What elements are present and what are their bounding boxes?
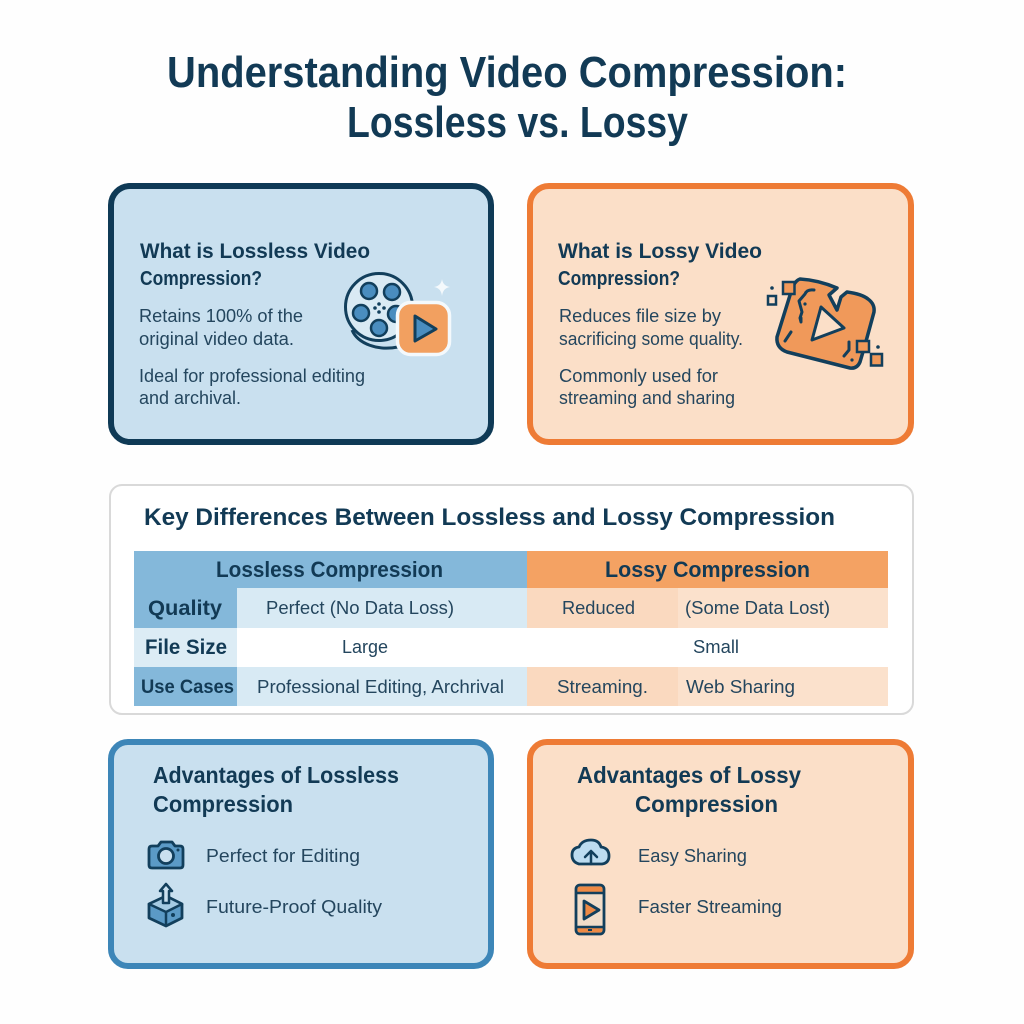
heading: advantages of lossy: Compression [635,791,778,817]
icon: phone with play [576,885,604,934]
panel: advantages of lossless [111,742,491,966]
heading: advantages of lossless: Compression [153,791,293,817]
heading: what is lossy: Compression? [558,267,680,290]
text: lossy description [559,306,743,408]
text: lossy description: Reduces file size by [559,306,721,326]
table row: quality: Perfect (No Data Loss) [266,597,454,618]
table row: quality: Reduced [562,597,635,618]
table row: file size: File Size [145,636,227,659]
heading: what is lossless: Compression? [140,267,262,290]
heading: key differences: Key Differences Between Lossless and Lossy Compression [144,504,835,531]
table header: lossless [134,551,527,588]
table row: file size: Large [342,636,388,657]
table row: use cases: Professional Editing, Archrival [257,676,504,697]
text: lossless description: Ideal for professional editing [139,366,365,386]
table row: use cases [134,667,888,706]
heading: what is lossless [140,239,370,290]
icon: box with up arrow [149,884,182,926]
icon: camera [149,842,183,868]
panel: what is lossless [111,186,491,442]
text: lossy description: Commonly used for [559,366,718,386]
text: lossless description [139,306,365,408]
text: faster streaming: Faster Streaming [638,897,782,917]
table row: use cases: Use Cases [141,676,234,698]
table row: file size: Small [693,636,739,657]
text: easy sharing: Easy Sharing [638,846,747,866]
text: lossy description: sacrificing some quality. [559,329,743,349]
icon: broken play button [768,279,882,368]
text: lossless description: and archival. [139,388,241,408]
heading: what is lossless: What is Lossless Video [140,239,370,263]
icon: cloud upload [572,840,609,864]
table row: quality: (Some Data Lost) [685,597,830,618]
table row: quality [134,588,888,628]
panel: what is lossy [530,186,911,442]
table row: quality: Quality [148,597,222,620]
table header: lossy: Lossy Compression [605,557,810,582]
table row: use cases: Streaming. [557,676,648,697]
heading: advantages of lossy [577,762,801,817]
heading: advantages of lossy: Advantages of Lossy [577,762,801,788]
table header: lossless: Lossless Compression [216,557,443,582]
text: lossy description: streaming and sharing [559,388,735,408]
panel: key differences [110,485,913,714]
text: lossless description: original video data. [139,329,294,349]
heading: advantages of lossless: Advantages of Lossless [153,762,399,788]
text: lossless description: Retains 100% of the [139,306,303,326]
text: perfect for editing: Perfect for Editing [206,846,360,866]
heading: what is lossy [558,239,762,290]
title: Lossless vs. Lossy [347,98,688,147]
title: Understanding Video Compression: [167,48,847,97]
comparison table [134,551,888,706]
table header: lossy [527,551,888,588]
panel: advantages of lossy [530,742,911,966]
title [167,48,847,147]
heading: advantages of lossless [153,762,399,817]
table row: use cases: Web Sharing [686,676,795,697]
heading: what is lossy: What is Lossy Video [558,239,762,263]
table row: file size [134,628,739,667]
text: future-proof quality: Future-Proof Quality [206,897,382,917]
icon: film reel with play button [346,274,450,354]
